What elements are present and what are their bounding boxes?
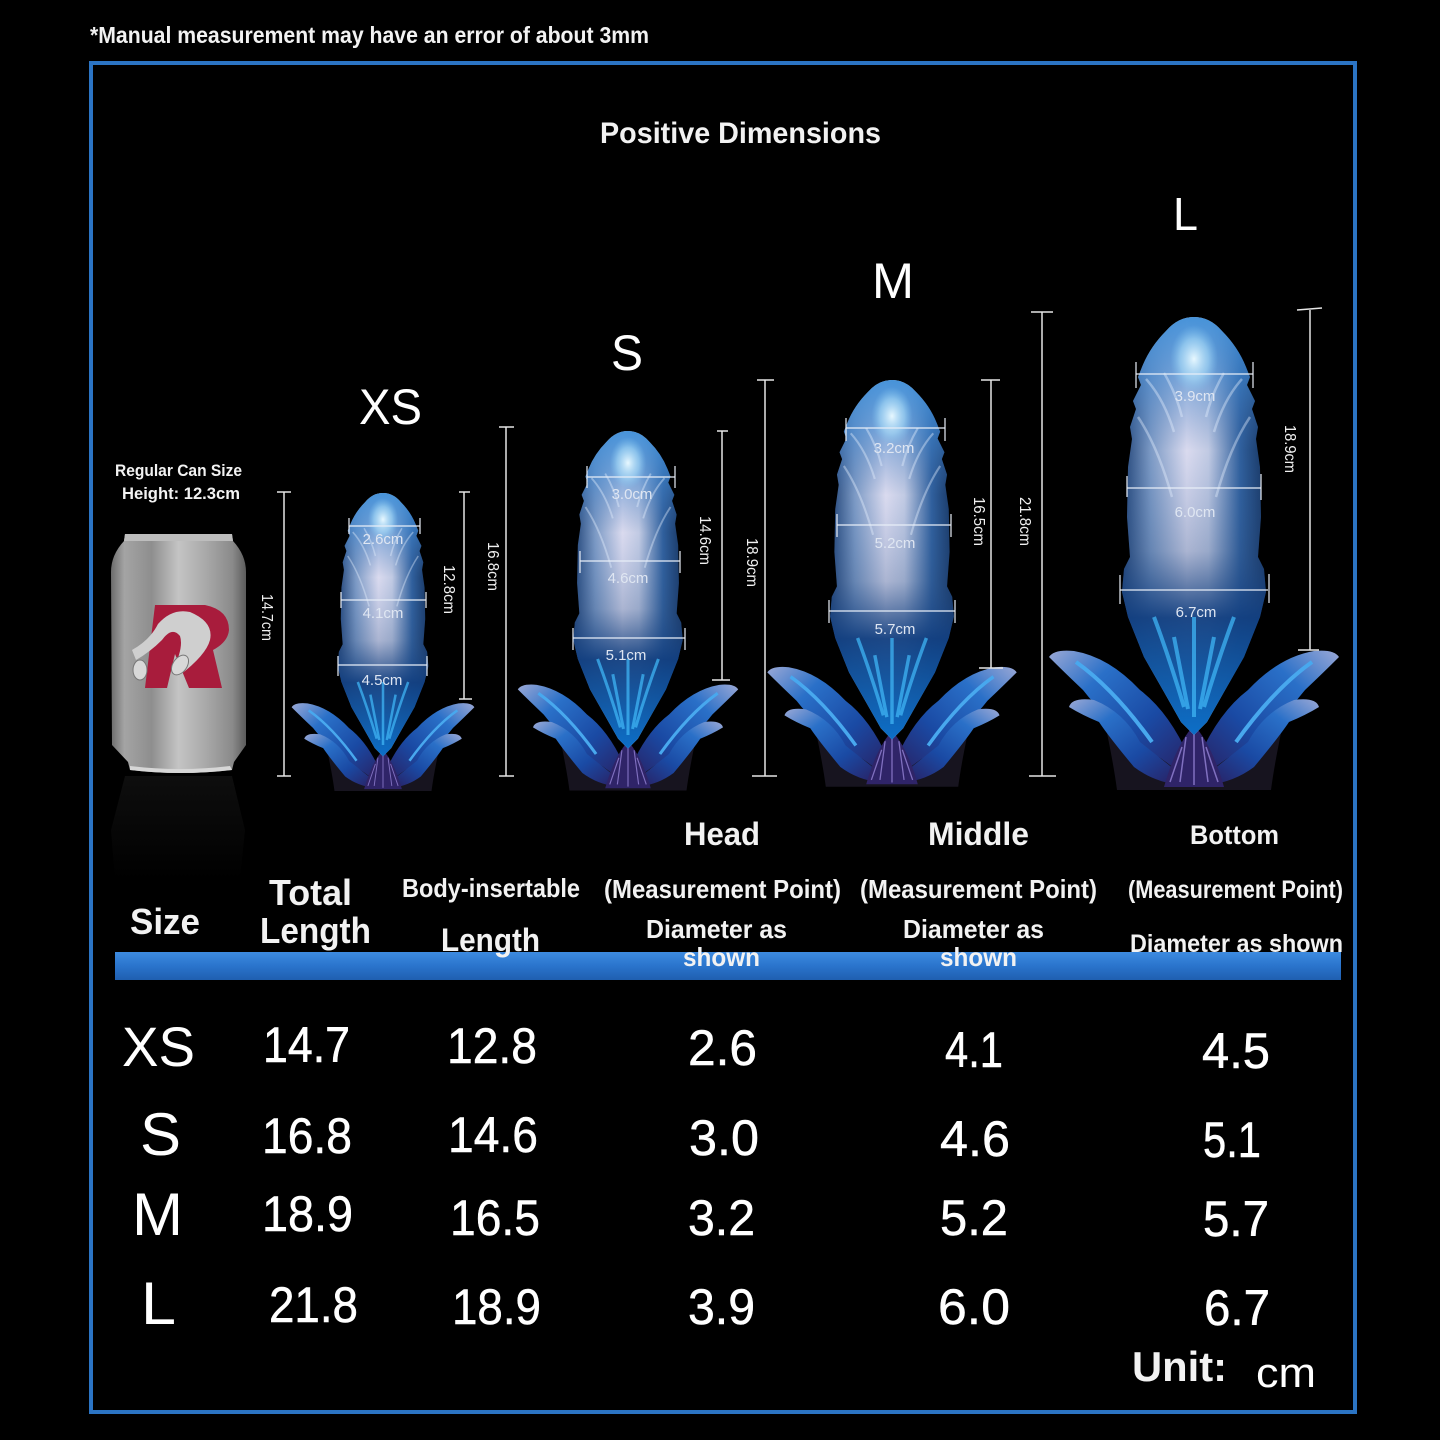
table row L: L (141, 1270, 176, 1337)
table row S (140, 1101, 1261, 1168)
total length marker L: 21.8cm (1016, 497, 1033, 546)
table row M: 5.2 (940, 1190, 1008, 1246)
table row L (141, 1270, 1270, 1337)
header: Total Length: Total (269, 872, 352, 913)
table row L: 6.0 (938, 1279, 1010, 1335)
table row XS: 12.8 (447, 1018, 537, 1074)
insertable length marker M (970, 380, 1003, 668)
header: Middle: Middle (928, 816, 1029, 852)
insertable length marker S: 14.6cm (696, 516, 713, 565)
diameter markers M: 5.2cm (875, 535, 915, 552)
table row L: 21.8 (269, 1277, 358, 1333)
header: Middle (860, 816, 1097, 972)
product XS (292, 493, 474, 791)
product L (1049, 317, 1339, 790)
unit note (1132, 1343, 1316, 1396)
reference can with caption (111, 461, 246, 880)
table row M (132, 1181, 1269, 1248)
size label S: S (611, 325, 643, 381)
header: Body-insertable Length: Length (441, 922, 540, 958)
table row L: 3.9 (688, 1279, 755, 1335)
unit note: cm (1256, 1349, 1316, 1396)
insertable length marker XS (440, 492, 472, 699)
header: Head (604, 816, 841, 972)
header: Bottom: Diameter as shown (1130, 930, 1343, 958)
header: Middle: Diameter as (903, 914, 1044, 944)
diameter markers L: 3.9cm (1175, 388, 1215, 405)
product S (518, 431, 738, 790)
can caption (115, 461, 242, 503)
table header bar (115, 952, 1341, 980)
can caption: Regular Can Size (115, 461, 242, 480)
diameter markers XS: 4.5cm (362, 672, 402, 689)
can caption: Height: 12.3cm (122, 484, 240, 503)
total length marker S: 16.8cm (484, 542, 501, 591)
total length marker XS (258, 492, 291, 776)
header: Bottom (1128, 820, 1343, 958)
total length marker S (484, 427, 514, 776)
table row S: 4.6 (940, 1111, 1010, 1167)
table header (130, 816, 1343, 972)
diameter markers L: 6.0cm (1175, 504, 1215, 521)
header: Size: Size (130, 901, 200, 942)
header: Body-insertable Length: Body-insertable (402, 873, 580, 903)
table row XS: XS (122, 1015, 195, 1078)
diameter markers M: 3.2cm (874, 440, 914, 457)
diameter markers L (1120, 362, 1269, 621)
header: Middle: shown (940, 942, 1017, 972)
insertable length marker XS: 12.8cm (440, 565, 457, 614)
diameter markers XS (338, 518, 427, 689)
header: Middle: (Measurement Point) (860, 874, 1097, 904)
header: Total Length: Length (260, 910, 371, 951)
table row M: 16.5 (450, 1190, 540, 1246)
table row XS: 14.7 (263, 1017, 350, 1073)
total length marker M (743, 380, 777, 776)
header: Bottom: (Measurement Point) (1128, 876, 1343, 904)
table row M: 3.2 (688, 1190, 755, 1246)
unit note: Unit: (1132, 1343, 1227, 1390)
header: Head: shown (683, 942, 760, 972)
header: Head: Head (684, 816, 760, 852)
measurement note: *Manual measurement may have an error of about 3mm (90, 22, 649, 48)
table row XS: 2.6 (688, 1020, 757, 1076)
header: Head: Diameter as (646, 914, 787, 944)
insertable length marker M: 16.5cm (970, 497, 987, 546)
size label M: M (872, 253, 914, 309)
icon: silver can (111, 534, 246, 773)
table row XS (122, 1015, 1270, 1079)
table row XS: 4.1 (945, 1022, 1003, 1078)
insertable length marker L (1281, 308, 1322, 650)
can reflection (111, 776, 245, 880)
diameter markers S: 5.1cm (606, 647, 646, 664)
total length marker M: 18.9cm (743, 538, 760, 587)
table row S: 3.0 (689, 1110, 759, 1166)
table row M: 5.7 (1203, 1191, 1269, 1247)
diameter markers XS: 4.1cm (363, 605, 403, 622)
header: Total Length (260, 872, 371, 951)
table row S: 14.6 (448, 1107, 538, 1163)
table row L: 18.9 (452, 1279, 541, 1335)
table row S: S (140, 1101, 181, 1168)
table row XS: 4.5 (1202, 1023, 1270, 1079)
insertable length marker L: 18.9cm (1281, 425, 1298, 473)
insertable length marker S (696, 431, 730, 680)
table row L: 6.7 (1204, 1280, 1270, 1336)
product M (767, 380, 1017, 787)
table row M: 18.9 (262, 1186, 353, 1242)
total length marker XS: 14.7cm (258, 594, 275, 641)
table row S: 16.8 (262, 1108, 352, 1164)
diameter markers S (573, 466, 685, 664)
header: Head: (Measurement Point) (604, 874, 841, 904)
total length marker L (1016, 312, 1056, 776)
header: Bottom: Bottom (1190, 820, 1279, 850)
title: Positive Dimensions (600, 117, 881, 150)
diameter markers M (829, 418, 955, 638)
diameter markers M: 5.7cm (875, 621, 915, 638)
diameter markers S: 3.0cm (612, 486, 652, 503)
size label XS: XS (359, 379, 422, 435)
table row S: 5.1 (1203, 1112, 1261, 1168)
diameter markers L: 6.7cm (1176, 604, 1216, 621)
size label L: L (1173, 188, 1198, 240)
header: Body-insertable Length (402, 873, 580, 958)
diameter markers S: 4.6cm (608, 570, 648, 587)
diameter markers XS: 2.6cm (363, 531, 403, 548)
table row M: M (132, 1181, 183, 1248)
